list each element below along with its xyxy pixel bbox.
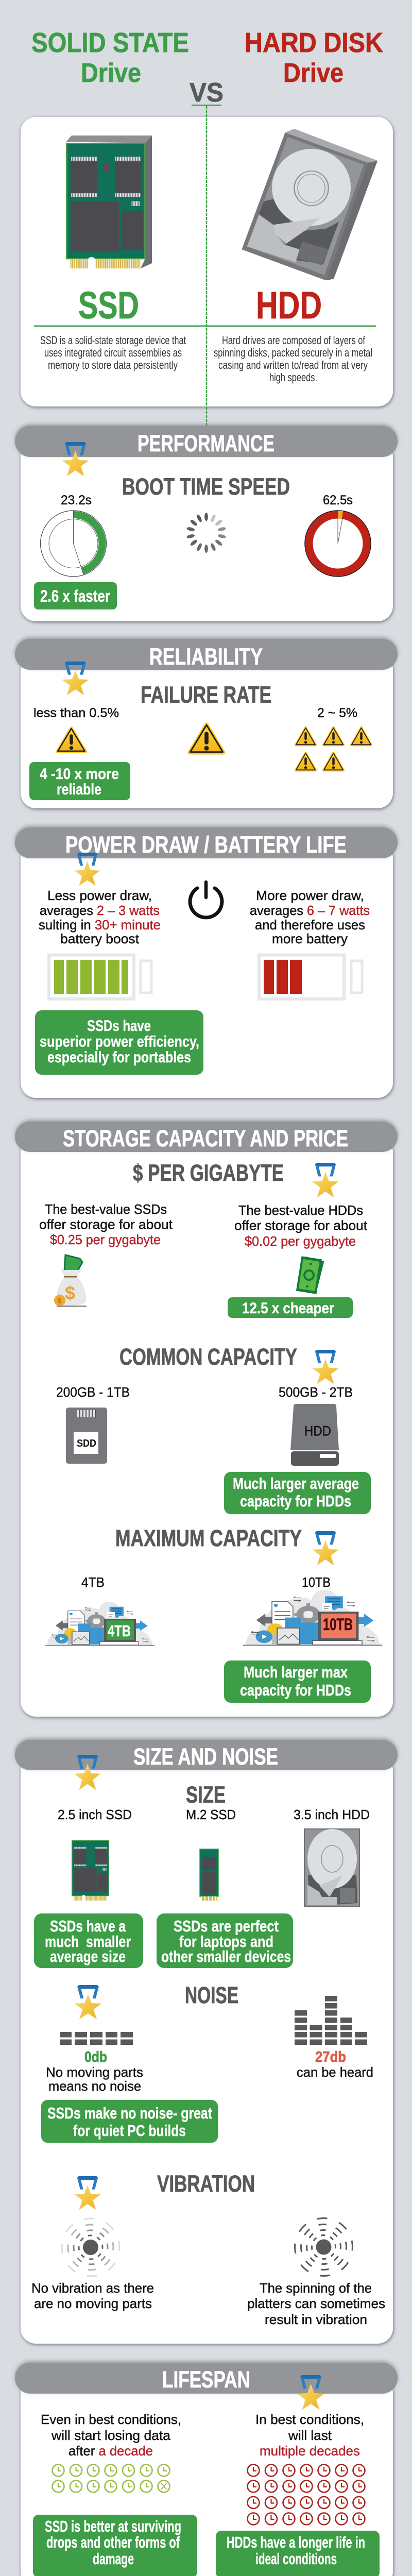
callout: HDD longer life <box>216 2531 380 2576</box>
heading: size: SIZE <box>186 1782 226 1808</box>
title: solid state drive: SOLID STATE <box>31 27 189 58</box>
chart: HDD boot ring <box>305 511 371 577</box>
stat: SSD max capacity: 4TB <box>81 1574 105 1590</box>
text: no moving parts: means no noise <box>48 2078 141 2094</box>
text: SSD power: battery boost <box>60 931 140 946</box>
icon: SSD drive: SDD <box>77 1438 96 1449</box>
section header: performance <box>15 426 398 457</box>
callout: larger average capacity: capacity for HDDs <box>240 1492 351 1510</box>
text: HDD lifespan <box>255 2412 364 2459</box>
text: HDD power: averages 6 – 7 watts <box>250 903 370 918</box>
stat: SSD failure rate: less than 0.5% <box>33 706 119 720</box>
stat: 27db: 27db <box>315 2049 346 2065</box>
text: HDD vibration: platters can sometimes <box>247 2296 385 2311</box>
stat: HDD max capacity: 10TB <box>302 1574 331 1590</box>
icon: SSD warning <box>57 728 85 752</box>
callout: power efficiency: SSDs have <box>87 1018 151 1035</box>
text: SSD lifespan <box>41 2412 181 2459</box>
text: HDD price: $0.02 per gygabyte <box>245 1233 356 1249</box>
callout: more reliable: reliable <box>57 781 101 798</box>
panel: intro <box>21 117 393 406</box>
heading: maximum capacity: MAXIMUM CAPACITY <box>115 1525 302 1551</box>
heading: common capacity: COMMON CAPACITY <box>119 1344 297 1370</box>
label: 3.5 inch HDD: 3.5 inch HDD <box>294 1807 370 1822</box>
text: SSD description: SSD is a solid-state storage device that <box>40 334 186 347</box>
text: SSD lifespan: after a decade <box>68 2443 153 2459</box>
callout: more reliable: 4 -10 x more <box>40 766 119 783</box>
callout: SSD survives damage: damage <box>93 2550 134 2568</box>
callout: perfect for laptops: for laptops and <box>179 1933 273 1951</box>
callout: no noise <box>41 2100 218 2143</box>
stat: SSD common capacity: 200GB - 1TB <box>56 1384 130 1400</box>
section header: reliability <box>15 639 398 670</box>
icon: loading spinner <box>186 513 226 553</box>
callout: no noise: for quiet PC builds <box>73 2122 186 2140</box>
icon: medal <box>313 1163 338 1197</box>
text: HDD vibration <box>247 2280 385 2327</box>
icon: 2.5 inch SSD <box>72 1841 109 1901</box>
icon: medal <box>75 853 100 886</box>
icon: centre warning <box>190 724 224 753</box>
callout: 12.5 x cheaper: 12.5 x cheaper <box>242 1300 334 1317</box>
heading: boot time speed: BOOT TIME SPEED <box>122 473 290 500</box>
text: HDD vibration: The spinning of the <box>260 2280 372 2296</box>
callout: no noise: SSDs make no noise- great <box>47 2104 212 2122</box>
icon: medal <box>298 2375 324 2410</box>
text: SSD power: averages 2 – 3 watts <box>40 903 160 918</box>
callout: larger max capacity <box>224 1660 371 1703</box>
text: HDD power: more battery <box>272 931 348 946</box>
icon: M.2 SSD <box>200 1849 218 1901</box>
text: HDD description: Hard drives are composed of layers of <box>222 334 366 347</box>
label: 2.5 inch SSD: 2.5 inch SSD <box>58 1807 132 1822</box>
callout: SSD smaller size: average size <box>50 1947 126 1965</box>
icon: medal <box>313 1531 338 1565</box>
callout: HDD longer life: ideal conditions <box>255 2550 337 2568</box>
panel: lifespan <box>15 2363 398 2576</box>
icon: money bag: $ <box>65 1282 75 1303</box>
callout: larger max capacity: Much larger max <box>244 1663 348 1681</box>
panel: power draw <box>15 827 398 1098</box>
icon: HDD battery <box>259 955 362 999</box>
callout: SSD survives damage: drops and other forms of <box>46 2533 180 2551</box>
heading: failure rate: FAILURE RATE <box>141 682 271 708</box>
callout: SSD smaller size <box>34 1913 143 1968</box>
chart: HDD lifespan clocks <box>247 2465 365 2524</box>
illustration: HDD data: 10TB <box>323 1615 353 1634</box>
chart: HDD noise level <box>295 1996 367 2045</box>
icons: HDD warnings <box>296 727 371 770</box>
section header: lifespan: LIFESPAN <box>162 2366 250 2393</box>
text: HDD price: offer storage for about <box>234 1218 368 1233</box>
text: can be heard: can be heard <box>297 2064 373 2080</box>
text: SSD price: The best-value SSDs <box>45 1201 167 1217</box>
chart: SSD lifespan clocks <box>53 2465 170 2493</box>
chart: SSD boot ring <box>40 511 106 577</box>
panel: size and noise <box>15 1740 398 2344</box>
callout: perfect for laptops: SSDs are perfect <box>174 1917 279 1935</box>
icon: HDD drive <box>290 1404 339 1466</box>
text: SSD vibration: are no moving parts <box>34 2296 152 2311</box>
text: HDD lifespan: In best conditions, <box>255 2412 364 2427</box>
title: hard disk drive: HARD DISK <box>245 27 383 58</box>
text: HDD description <box>214 334 372 384</box>
illustration: SSD data <box>45 1602 154 1646</box>
section header: performance: PERFORMANCE <box>138 430 274 456</box>
callout: larger max capacity: capacity for HDDs <box>240 1681 351 1699</box>
icon: HDD drive: HDD <box>304 1423 331 1438</box>
icon: medal <box>75 1985 101 2019</box>
section header: lifespan <box>15 2363 398 2394</box>
panel: reliability <box>15 639 398 808</box>
icon: SSD drive <box>66 1408 107 1464</box>
callout: larger average capacity <box>224 1472 371 1514</box>
text: no moving parts <box>46 2064 143 2094</box>
label: HDD: HDD <box>256 284 322 327</box>
callout: perfect for laptops: other smaller devices <box>161 1947 291 1965</box>
text: SSD vibration: No vibration as there <box>31 2280 154 2296</box>
text: SSD price: $0.25 per gygabyte <box>50 1232 161 1247</box>
icon: SSD battery <box>49 955 151 999</box>
text: HDD power <box>250 888 370 946</box>
callout: perfect for laptops <box>157 1913 293 1968</box>
callout: SSD survives damage <box>33 2515 197 2576</box>
text: HDD price <box>234 1202 368 1249</box>
text: HDD power: and therefore uses <box>255 917 365 933</box>
icon: 3.5 inch HDD <box>304 1829 359 1907</box>
callout: 2.6 x faster: 2.6 x faster <box>40 587 110 605</box>
label: M.2 SSD: M.2 SSD <box>186 1807 236 1822</box>
text: SSD price: offer storage for about <box>39 1217 173 1232</box>
panel: storage capacity and price <box>15 1122 398 1717</box>
text: HDD description: high speeds. <box>269 371 317 384</box>
icon: hard disk drive <box>242 129 377 280</box>
icon: vibration <box>295 2218 353 2276</box>
illustration: SSD data: 4TB <box>108 1622 131 1640</box>
heading: noise: NOISE <box>185 1982 238 2008</box>
callout: SSD smaller size: SSDs have a <box>50 1917 126 1935</box>
text: SSD lifespan: Even in best conditions, <box>41 2412 181 2427</box>
callout: more reliable <box>29 762 130 800</box>
text: HDD vibration: result in vibration <box>265 2312 367 2327</box>
heading: vibration: VIBRATION <box>157 2171 255 2197</box>
section header: size and noise <box>15 1740 398 1770</box>
icon: money bag <box>54 1255 87 1307</box>
icon: medal <box>75 2176 100 2210</box>
section header: size and noise: SIZE AND NOISE <box>133 1743 278 1770</box>
text: HDD power: More power draw, <box>256 888 364 903</box>
text: SSD vibration <box>31 2280 154 2311</box>
label: SSD: SSD <box>78 284 139 327</box>
chart: SSD noise level <box>60 2032 133 2045</box>
text: SSD price <box>39 1201 173 1247</box>
text: SSD description: memory to store data persistently <box>48 359 178 371</box>
icon: medal <box>62 442 89 476</box>
icon: no vibration <box>62 2218 119 2276</box>
callout: 2.6 x faster <box>34 582 117 609</box>
icon: power button <box>190 882 222 918</box>
callout: power efficiency <box>35 1010 203 1075</box>
stat: 0db: 0db <box>84 2049 107 2065</box>
text: SSD power: sulting in 30+ minute <box>39 917 161 933</box>
text: SSD power: Less power draw, <box>47 888 152 903</box>
callout: power efficiency: especially for portables <box>47 1049 191 1066</box>
section header: power draw: POWER DRAW / BATTERY LIFE <box>65 832 347 858</box>
callout: SSD survives damage: SSD is better at surviving <box>45 2517 181 2535</box>
callout: SSD smaller size: much smaller <box>45 1933 131 1951</box>
VS label: VS <box>190 78 224 108</box>
title: solid state drive <box>31 27 189 88</box>
panel: performance <box>15 426 398 621</box>
callout: larger average capacity: Much larger average <box>233 1475 359 1493</box>
text: SSD lifespan: will start losing data <box>51 2428 171 2443</box>
text: HDD price: The best-value HDDs <box>238 1202 363 1218</box>
illustration: HDD data <box>243 1590 382 1646</box>
stat: HDD failure rate: 2 ~ 5% <box>317 706 357 720</box>
title: solid state drive: Drive <box>81 58 141 88</box>
icon: SSD module <box>66 135 152 268</box>
section header: reliability: RELIABILITY <box>149 643 263 670</box>
text: HDD lifespan: will last <box>288 2428 332 2443</box>
text: HDD lifespan: multiple decades <box>260 2443 360 2459</box>
icon: medal <box>62 662 89 695</box>
text: SSD power <box>39 888 161 946</box>
heading: dollars per gigabyte: $ PER GIGABYTE <box>133 1160 284 1186</box>
icon: money bag: $ <box>58 1297 62 1304</box>
text: SSD description <box>40 334 186 371</box>
icon: bills <box>296 1256 324 1294</box>
text: HDD description: casing and written to/read from at very <box>218 359 368 371</box>
icon: medal <box>75 1755 100 1790</box>
text: SSD description: uses integrated circuit assemblies as <box>44 346 182 359</box>
stat: HDD boot time: 62.5s <box>323 493 353 507</box>
stat: SSD boot time: 23.2s <box>61 493 92 507</box>
text: no moving parts: No moving parts <box>46 2064 143 2080</box>
stat: HDD common capacity: 500GB - 2TB <box>279 1384 353 1400</box>
title: hard disk drive: Drive <box>283 58 344 88</box>
icon: medal <box>313 1350 338 1384</box>
title: hard disk drive <box>245 27 383 88</box>
callout: power efficiency: superior power efficiency, <box>40 1033 199 1050</box>
